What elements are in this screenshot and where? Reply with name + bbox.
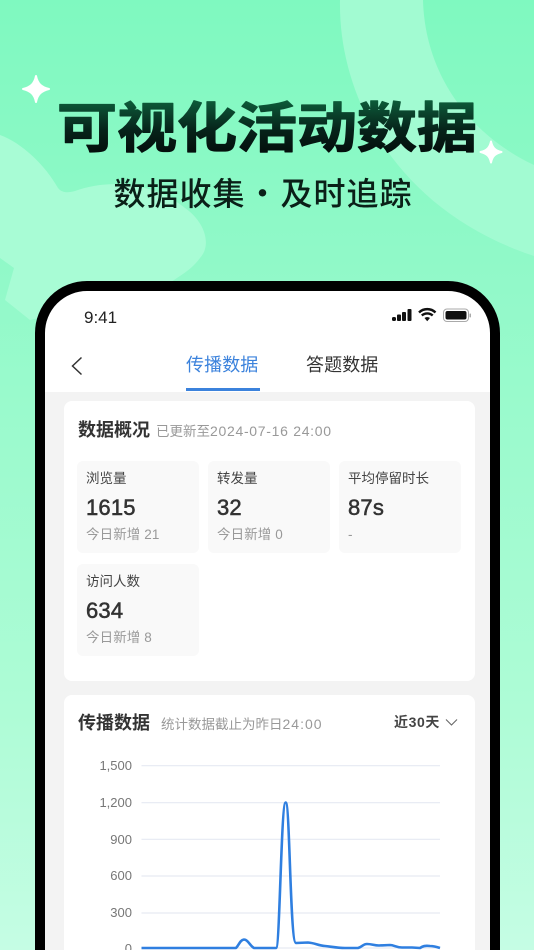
stat: visitors: 今日新增 8 xyxy=(86,630,152,645)
stat: visitors: 634 xyxy=(86,598,123,623)
stat: views: 今日新增 21 xyxy=(86,527,159,542)
range selector: 近30天 xyxy=(394,714,440,730)
line chart xyxy=(142,765,440,950)
stat: shares xyxy=(208,461,330,553)
phone mockup xyxy=(35,281,500,950)
stat: views: 1615 xyxy=(86,495,136,520)
stat: average stay: 87s xyxy=(348,495,384,520)
y axis labels: 1,200 xyxy=(99,795,132,810)
y axis labels: 600 xyxy=(110,868,132,883)
icon: sparkle right xyxy=(480,140,502,164)
y axis labels xyxy=(99,758,132,950)
subtitle: 数据收集・及时追踪 xyxy=(114,176,413,212)
note: 统计数据截止为昨日24:00 xyxy=(161,716,323,732)
back arrow xyxy=(72,357,82,375)
stat: views xyxy=(77,461,199,553)
y axis labels: 300 xyxy=(110,905,132,920)
stat: views: 浏览量 xyxy=(86,471,126,486)
stat: shares: 32 xyxy=(217,495,242,520)
icon: sparkle left xyxy=(22,75,50,103)
y axis labels: 900 xyxy=(110,832,132,847)
content background xyxy=(45,392,490,950)
status bar icons xyxy=(392,308,471,322)
stat: visitors xyxy=(77,564,199,656)
stat: average stay: - xyxy=(348,527,353,542)
icon: chevron xyxy=(446,719,458,726)
y axis labels: 1,500 xyxy=(99,758,132,773)
tab: inactive: 答题数据 xyxy=(306,355,378,375)
tab: active: 传播数据 xyxy=(186,355,258,375)
heading: 数据概况 xyxy=(78,420,150,440)
panel: spread data xyxy=(64,695,475,950)
stat: shares: 转发量 xyxy=(217,471,258,486)
stat: average stay xyxy=(339,461,461,553)
tab underline xyxy=(186,388,260,390)
panel: data overview xyxy=(64,401,475,681)
stat: shares: 今日新增 0 xyxy=(217,527,283,542)
title: 可视化活动数据 xyxy=(57,99,477,159)
update time: 已更新至2024-07-16 24:00 xyxy=(156,423,332,439)
status bar time: 9:41 xyxy=(84,308,117,327)
heading: 传播数据 xyxy=(78,713,150,733)
stat: average stay: 平均停留时长 xyxy=(348,471,429,486)
stat: visitors: 访问人数 xyxy=(86,574,140,589)
